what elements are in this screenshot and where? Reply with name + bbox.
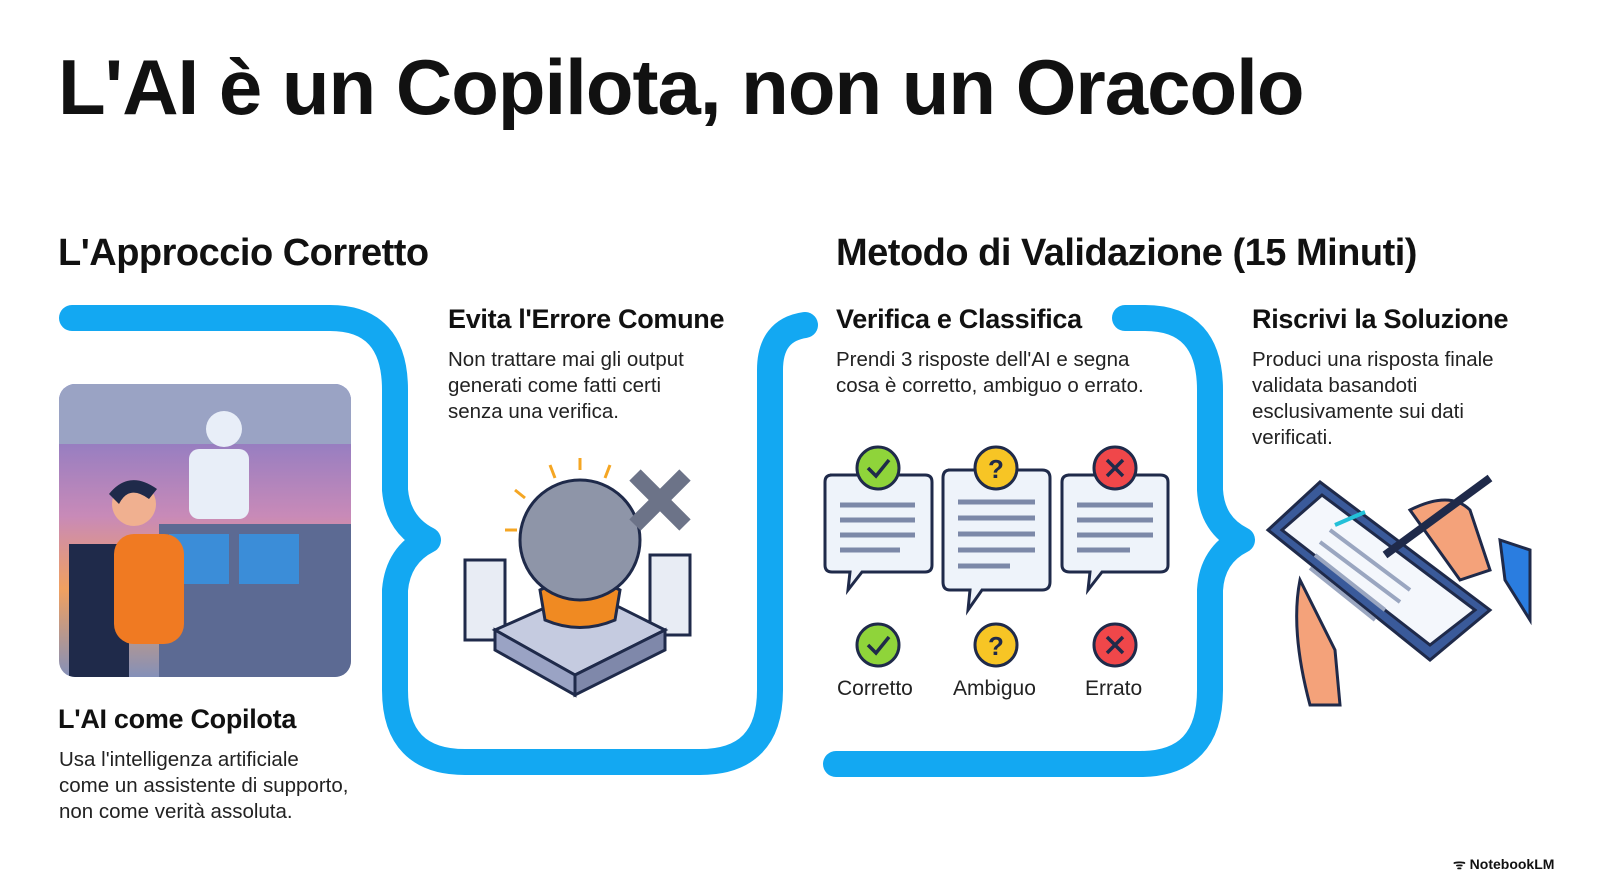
title: L'AI è un Copilota, non un Oracolo: [58, 43, 1304, 131]
text: errore: Non trattare mai gli output: [448, 348, 684, 371]
text: verifica: [836, 348, 1144, 397]
illustration: cockpit: [59, 384, 351, 677]
text: riscrivi: validata basandoti: [1252, 374, 1417, 397]
text: riscrivi: esclusivamente sui dati: [1252, 400, 1464, 423]
text: copilota: Usa l'intelligenza artificiale: [59, 748, 299, 771]
text: copilota: come un assistente di supporto,: [59, 774, 348, 797]
icon: crystal ball with X: [464, 458, 692, 698]
text: errore: [448, 348, 684, 423]
icon group: three bubbles: ?: [988, 631, 1004, 661]
icon: tablet with hands: [1266, 474, 1532, 706]
watermark: ᯤ NotebookLM: [1453, 856, 1554, 872]
text: verifica: Prendi 3 risposte dell'AI e segna: [836, 348, 1129, 371]
text: Errato: [1085, 677, 1142, 700]
text: Corretto: [837, 677, 913, 700]
heading: verifica: Verifica e Classifica: [836, 304, 1082, 334]
text: Ambiguo: [953, 677, 1036, 700]
heading: approccio corretto: L'Approccio Corretto: [58, 232, 429, 274]
icon group: three bubbles: ?: [988, 454, 1004, 484]
text: riscrivi: verificati.: [1252, 426, 1333, 449]
heading: AI come copilota: L'AI come Copilota: [58, 704, 296, 734]
text: riscrivi: [1252, 348, 1494, 449]
heading: metodo di validazione: Metodo di Validazione (15 Minuti): [836, 232, 1417, 274]
text: riscrivi: Produci una risposta finale: [1252, 348, 1494, 371]
text: copilota: non come verità assoluta.: [59, 800, 293, 823]
heading: evita errore: Evita l'Errore Comune: [448, 304, 724, 334]
text: errore: senza una verifica.: [448, 400, 619, 423]
text: verifica: cosa è corretto, ambiguo o errato.: [836, 374, 1144, 397]
labels: classification: [837, 677, 1142, 700]
text: copilota: [59, 748, 348, 823]
text: errore: generati come fatti certi: [448, 374, 661, 397]
heading: riscrivi: Riscrivi la Soluzione: [1252, 304, 1508, 334]
icon group: three bubbles: [824, 446, 1170, 668]
